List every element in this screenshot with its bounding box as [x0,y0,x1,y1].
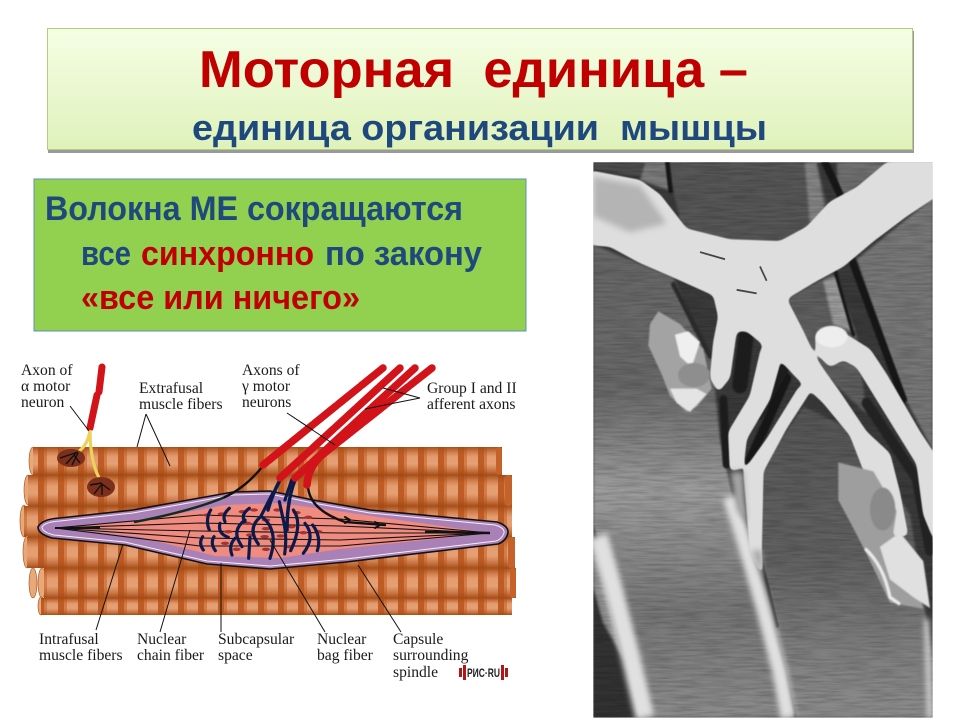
title panel [48,28,914,153]
label: axon of alpha motor neuron: neuron [21,394,65,411]
label: subcapsular space: space [218,647,253,664]
text line 2: по закону [325,235,482,273]
text line 3: «все или ничего» [81,279,360,317]
extrafusal muscle fibers [20,447,516,615]
bright fiber edges [598,497,930,718]
muscle fibers background [668,162,828,241]
panel: text callout [34,179,526,331]
label: capsule surrounding spindle: spindle [393,664,438,681]
alpha motor axon [57,367,115,497]
label: capsule surrounding spindle: surrounding [393,647,469,664]
label: axons of gamma motor neurons: Axons of [242,362,300,379]
label: nuclear chain fiber: chain fiber [137,647,205,664]
text line 2: синхронно [141,235,314,273]
dark gaps [667,162,930,626]
intrafusal fiber lines [55,515,490,546]
nuclei and nerve endings [201,480,322,558]
subcapsular pink interior [60,503,490,558]
label: axons of gamma motor neurons: neurons [242,394,291,411]
fiber surface striations [593,162,933,718]
spindle capsule [38,491,508,569]
capsule highlight line [42,494,504,566]
icon: watermark logo: РИС·RU [467,666,500,680]
nerve branches [590,159,937,579]
text line 1: Волокна МЕ сокращаются [45,190,463,228]
heading: main title: Моторная единица – [199,41,748,99]
label: nuclear bag fiber: bag fiber [317,647,374,664]
gamma motor axons [135,368,432,530]
right nerve terminal [838,462,923,609]
text line 2: все [81,235,131,273]
label: extrafusal muscle fibers: Extrafusal [139,380,203,397]
label: nuclear bag fiber: Nuclear [317,631,366,648]
label: group I and II afferent axons: afferent axons [427,396,515,413]
text line 2 [81,235,482,273]
heading: subtitle: единица организации мышцы [192,107,767,148]
label: axons of gamma motor neurons: γ motor [241,378,291,395]
label: axon of alpha motor neuron: Axon of [21,362,73,379]
label: group I and II afferent axons: Group I and II [427,380,517,397]
chart: muscle spindle diagram [20,362,517,681]
shaded upper-left nerve [593,177,667,232]
label: capsule surrounding spindle: Capsule [393,631,443,648]
label: nuclear chain fiber: Nuclear [137,631,186,648]
creases at junction [700,252,767,293]
photo: electron micrograph of motor nerve on muscle fibers [590,159,937,718]
label: intrafusal muscle fibers: Intrafusal [39,631,99,648]
leader lines [70,388,420,632]
left nerve terminal [648,311,712,412]
label: axon of alpha motor neuron: α motor [21,378,71,395]
label: intrafusal muscle fibers: muscle fibers [39,647,123,664]
label: subcapsular space: Subcapsular [218,631,294,648]
label: extrafusal muscle fibers: muscle fibers [139,396,223,413]
